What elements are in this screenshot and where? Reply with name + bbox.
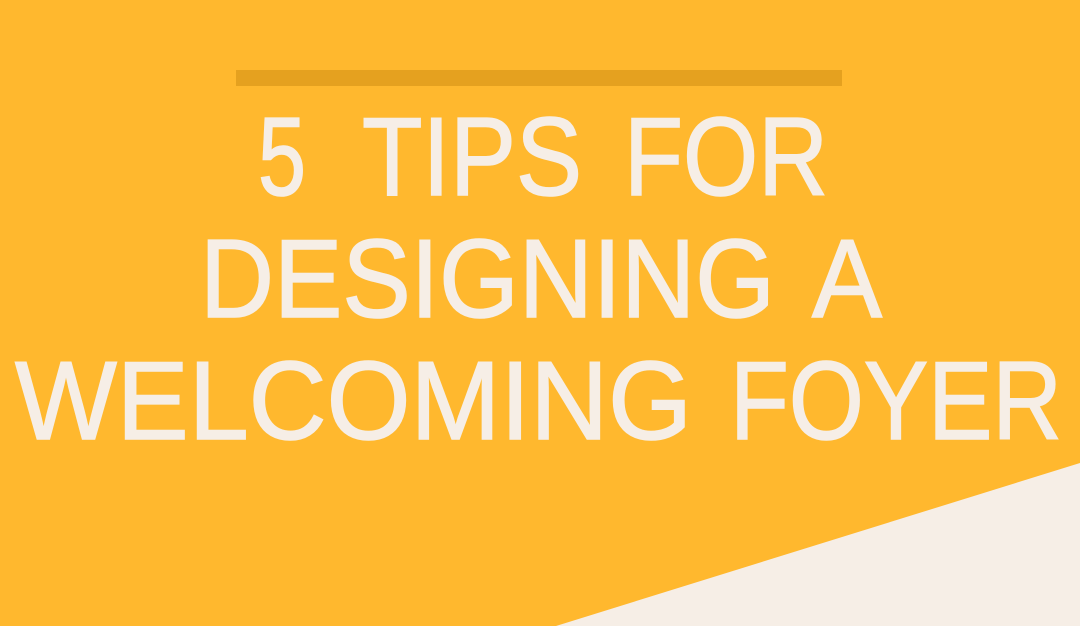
title line 1: FOR: [624, 95, 828, 219]
accent bar above title: [236, 70, 842, 86]
cream corner shape: [556, 463, 1080, 626]
title: [15, 95, 1062, 463]
title line 2: A: [812, 217, 882, 341]
title line 1: [258, 95, 828, 219]
title line 3: [15, 339, 1062, 463]
title line 3: WELCOMING: [15, 339, 692, 463]
title line 2: DESIGNING: [200, 217, 775, 341]
title line 1: TIPS: [362, 95, 582, 219]
title line 1: 5: [258, 95, 306, 219]
